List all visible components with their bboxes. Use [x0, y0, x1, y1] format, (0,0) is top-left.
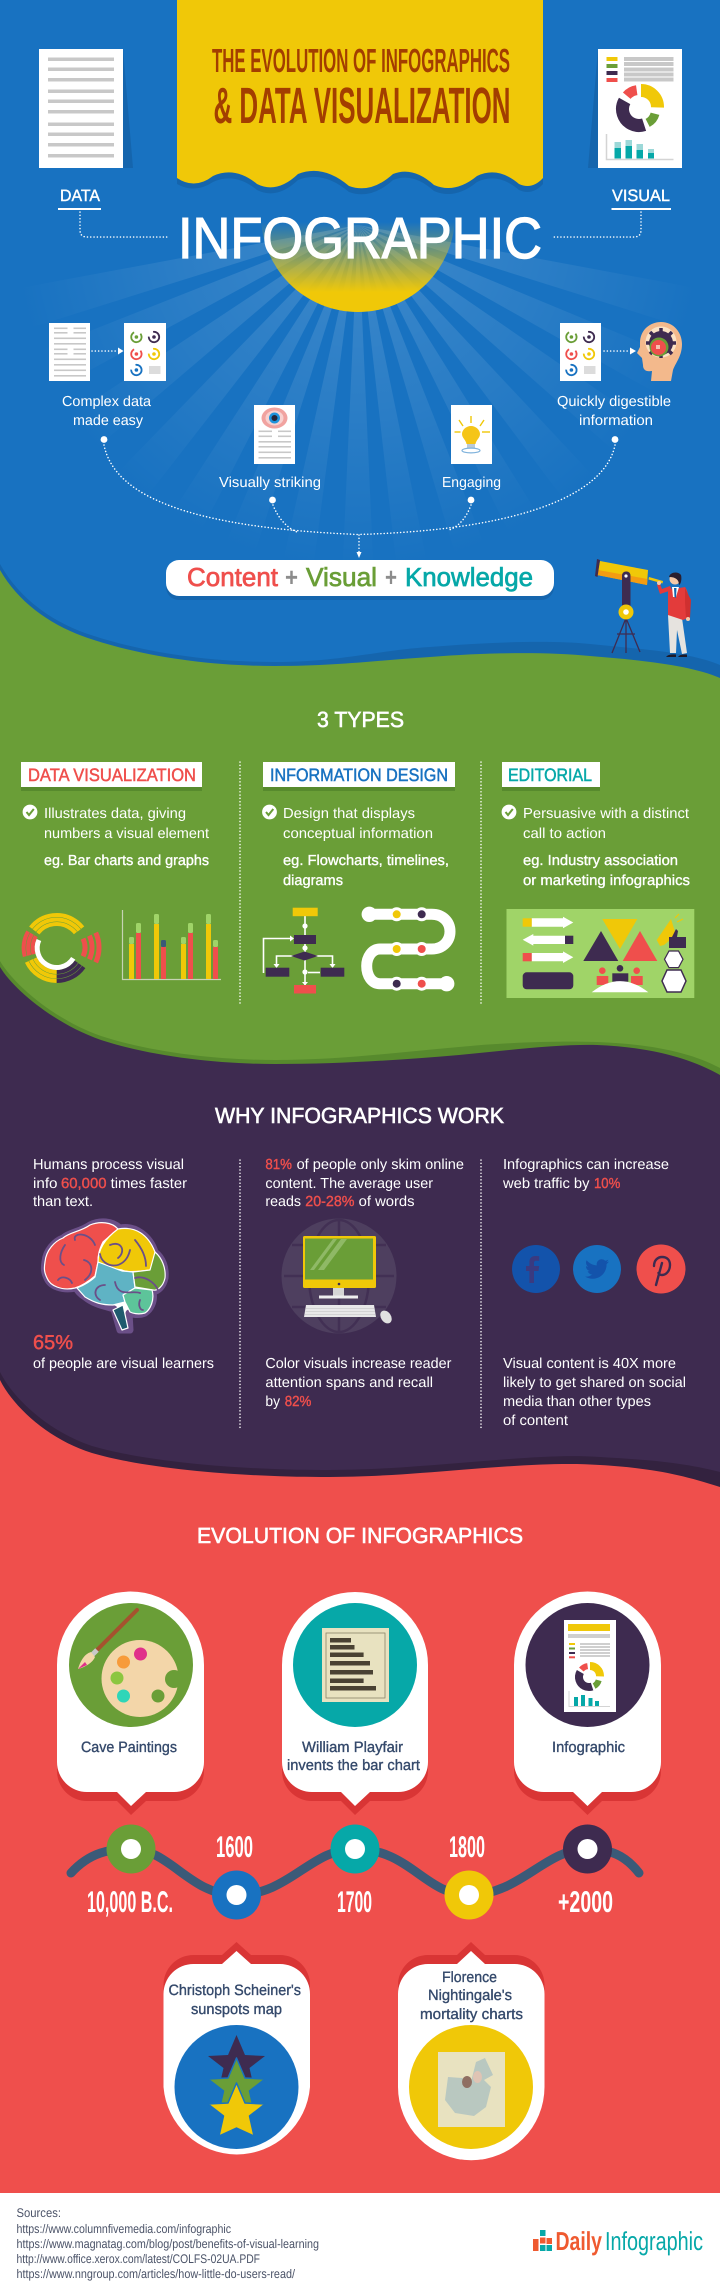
timeline line — [71, 1849, 639, 1895]
title banner — [177, 0, 543, 194]
tag: information design: INFORMATION DESIGN — [270, 765, 448, 785]
formula pill: content + visual + knowledge: Content — [187, 562, 279, 592]
icon: icon document — [124, 323, 166, 381]
sources: http://www.office.xerox.com/latest/COLFS-02UA.PDF — [16, 2252, 260, 2266]
text block: color visuals: attention spans and recall — [265, 1375, 433, 1391]
timeline node: 1600 — [212, 1831, 261, 1920]
text block: web traffic — [502, 1157, 669, 1192]
formula pill: content + visual + knowledge: + — [285, 562, 298, 592]
icon: colored brain — [44, 1222, 165, 1330]
text block: shared on social media: of content — [503, 1413, 568, 1429]
sources: https://www.nngroup.com/articles/how-little-do-users-read/ — [16, 2267, 295, 2281]
text block: web traffic: web traffic by — [502, 1176, 590, 1192]
arrow: dotted — [604, 348, 636, 354]
text block: editorial: Persuasive with a distinct — [523, 806, 689, 822]
icon: plain document — [49, 323, 90, 381]
icon: bar chart parchment — [322, 1628, 389, 1702]
text block: web traffic: 10% — [594, 1176, 620, 1192]
label: florence nightingale — [420, 1969, 523, 2023]
text block: color visuals — [265, 1356, 452, 1410]
text: quickly digestible information: Quickly digestible — [557, 394, 671, 410]
text block: color visuals: 82% — [285, 1394, 311, 1410]
label: florence nightingale: Florence — [442, 1969, 497, 1986]
timeline node: +2000 — [558, 1824, 613, 1919]
text block: 81% skim: of words — [359, 1194, 415, 1210]
icon: nightingale rose chart — [438, 2052, 505, 2127]
tag: information design — [263, 762, 455, 791]
text block: data visualization: eg. Bar charts and graphs — [44, 853, 209, 869]
pin: infographic — [514, 1592, 661, 1815]
icon: twitter — [573, 1245, 621, 1293]
text block: 81% skim — [265, 1157, 464, 1210]
logo: daily infographic: Daily — [556, 2226, 602, 2256]
text block: editorial: or marketing infographics — [523, 873, 690, 889]
chart: radial donut — [10, 901, 111, 994]
text block: web traffic: Infographics can increase — [503, 1157, 669, 1173]
chart: timeline road — [362, 907, 454, 991]
text block: 81% skim: reads — [265, 1194, 301, 1210]
timeline node: 1700 — [330, 1824, 380, 1919]
text block: information design: diagrams — [283, 873, 343, 889]
tag: editorial — [502, 762, 600, 791]
text block: 81% skim: 81% — [265, 1157, 292, 1173]
label: florence nightingale: Nightingale's — [428, 1987, 512, 2004]
timeline node: +2000: +2000 — [558, 1886, 613, 1919]
label: william playfair: invents the bar chart — [287, 1757, 421, 1774]
heading: infographic: INFOGRAPHIC — [178, 206, 542, 271]
text block: information design — [262, 805, 449, 889]
timeline node: 10,000 B.C.: 10,000 B.C. — [87, 1886, 173, 1919]
section background: blue intro — [0, 0, 720, 678]
text: complex data made easy: made easy — [73, 413, 144, 429]
item: complex data made easy — [49, 323, 166, 429]
formula pill: content + visual + knowledge: Visual — [306, 562, 377, 592]
section background: green three types — [0, 500, 720, 1075]
text block: editorial — [502, 805, 690, 889]
text block: information design: conceptual information — [283, 826, 433, 842]
stat: 65% visual learners: of people are visual learners — [33, 1356, 214, 1372]
section: three types — [10, 707, 694, 1005]
icon: infographic document — [564, 1620, 616, 1712]
label: infographic: Infographic — [552, 1739, 625, 1756]
icon: data document — [39, 49, 133, 168]
icon: palette and brush — [78, 1610, 183, 1717]
tag: data visualization — [21, 762, 202, 791]
stat: 65% visual learners: 65% — [33, 1332, 73, 1354]
icon: computer on globe — [282, 1218, 396, 1334]
text block: information design: eg. Flowcharts, timelines, — [283, 853, 449, 869]
label: cave paintings: Cave Paintings — [81, 1739, 177, 1756]
pin: william playfair — [282, 1592, 428, 1815]
text: complex data made easy: Complex data — [62, 394, 152, 410]
arrow: dotted — [92, 348, 124, 354]
icon: light bulb document — [451, 405, 492, 464]
label: christoph scheiner — [168, 1982, 301, 2018]
icon: stacked stars — [208, 2035, 265, 2136]
dotted connector: visual to infographic — [553, 212, 641, 237]
section: evolution of infographics — [57, 1523, 661, 2160]
text block: humans process visual: than text. — [33, 1194, 93, 1210]
sun — [261, 118, 455, 312]
timeline node: 1600: 1600 — [216, 1831, 253, 1864]
section background: red evolution — [0, 1300, 720, 2193]
text block: color visuals: Color visuals increase reader — [265, 1356, 452, 1372]
logo: daily infographic — [533, 2226, 703, 2256]
text block: 81% skim: of people only skim online — [297, 1157, 464, 1173]
text block: data visualization: Illustrates data, giving — [44, 806, 186, 822]
text block: 81% skim: content. The average user — [265, 1176, 433, 1192]
icon: pinterest — [636, 1244, 686, 1294]
timeline node: 1800: 1800 — [449, 1831, 485, 1864]
label: christoph scheiner: sunspots map — [191, 2001, 282, 2018]
label: visual: VISUAL — [612, 187, 670, 205]
text block: humans process visual: info — [33, 1176, 58, 1192]
text block: data visualization — [23, 805, 209, 869]
text block: humans process visual: times faster — [111, 1176, 187, 1192]
item: engaging — [442, 405, 501, 491]
dotted connectors converging to formula — [101, 436, 618, 558]
text block: 81% skim: 20-28% — [305, 1194, 355, 1210]
timeline node: 1800 — [444, 1831, 494, 1920]
dotted connector: data to infographic — [80, 212, 168, 237]
formula pill: content + visual + knowledge — [166, 560, 554, 600]
text block: editorial: eg. Industry association — [523, 853, 678, 869]
tag: data visualization: DATA VISUALIZATION — [28, 765, 196, 785]
icon: facebook — [512, 1245, 560, 1293]
label: william playfair — [287, 1739, 421, 1774]
text block: information design: Design that displays — [283, 806, 415, 822]
stat: 65% visual learners — [33, 1332, 214, 1372]
timeline node: 1700: 1700 — [337, 1886, 372, 1919]
text block: shared on social media — [503, 1356, 686, 1429]
formula pill: content + visual + knowledge: Knowledge — [405, 562, 533, 592]
sources: https://www.magnatag.com/blog/post/benefits-of-visual-learning — [16, 2237, 319, 2251]
sun rays — [0, 202, 720, 625]
label: christoph scheiner: Christoph Scheiner's — [168, 1982, 301, 1999]
sources: https://www.columnfivemedia.com/infographic — [16, 2222, 231, 2236]
pin: florence nightingale — [398, 1942, 544, 2160]
heading: why infographics work: WHY INFOGRAPHICS WORK — [215, 1103, 504, 1128]
label: florence nightingale: mortality charts — [420, 2006, 523, 2023]
text: quickly digestible information — [557, 394, 671, 429]
text block: shared on social media: media than other types — [503, 1394, 651, 1410]
text block: editorial: call to action — [523, 826, 606, 842]
text block: shared on social media: Visual content is 40X more — [503, 1356, 676, 1372]
section background: purple why infographics work — [0, 900, 720, 1487]
text: engaging: Engaging — [442, 475, 501, 491]
timeline node: 10,000 B.C. — [87, 1824, 173, 1919]
sources: Sources: — [16, 2206, 61, 2220]
label: data: DATA — [60, 187, 100, 205]
icon: visual document — [588, 49, 682, 168]
item: quickly digestible information — [557, 322, 682, 429]
text block: shared on social media: likely to get shared on social — [503, 1375, 686, 1391]
text block: humans process visual — [33, 1157, 187, 1210]
sources — [16, 2206, 319, 2281]
text: complex data made easy — [62, 394, 152, 429]
heading: evolution of infographics: EVOLUTION OF INFOGRAPHICS — [197, 1523, 523, 1548]
heading: 3 types: 3 TYPES — [317, 707, 404, 732]
pin: cave paintings — [57, 1592, 204, 1815]
text block: humans process visual: Humans process visual — [33, 1157, 184, 1173]
icon: eye document — [254, 405, 295, 464]
tag: editorial: EDITORIAL — [508, 765, 592, 785]
label: william playfair: William Playfair — [302, 1739, 403, 1756]
icon: telescope and person — [595, 559, 691, 657]
icon: icon document — [560, 323, 601, 381]
icon: head with gears — [637, 322, 682, 381]
text block: humans process visual: 60,000 — [61, 1176, 106, 1192]
text: quickly digestible information: information — [579, 413, 653, 429]
text block: color visuals: by — [265, 1394, 281, 1410]
item: visually striking — [219, 405, 321, 491]
chart: flowchart — [264, 908, 344, 994]
text block: data visualization: numbers a visual element — [44, 826, 209, 842]
section: why infographics work — [33, 1103, 686, 1429]
text: visually striking: Visually striking — [219, 475, 321, 491]
formula pill: content + visual + knowledge: + — [385, 562, 397, 592]
pin: christoph scheiner — [164, 1942, 310, 2154]
chart: bar chart — [122, 910, 221, 980]
chart: editorial icons panel — [506, 909, 694, 998]
